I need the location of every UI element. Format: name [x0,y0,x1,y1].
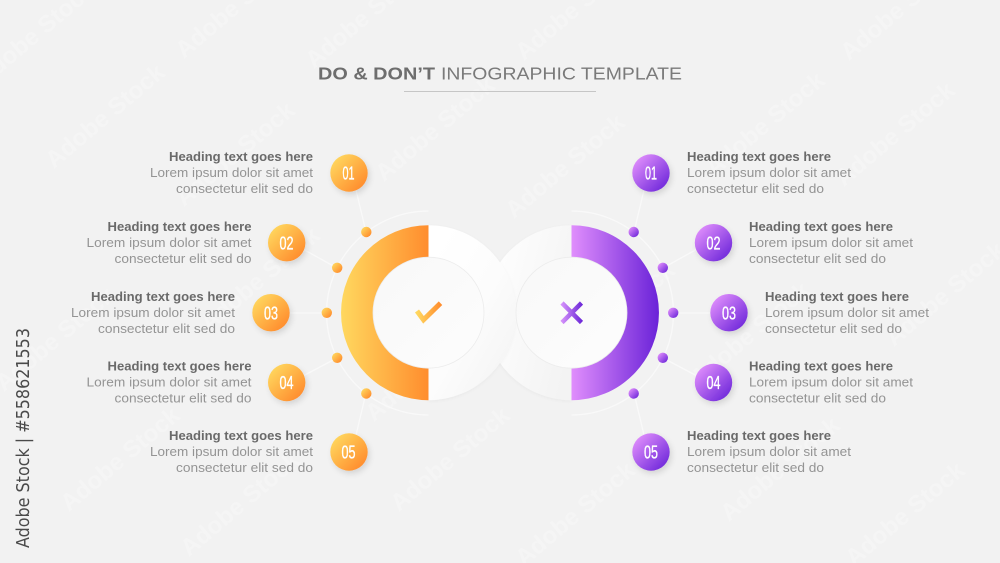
watermark: Adobe Stock [830,76,961,192]
watermark: Adobe Stock [170,96,301,212]
ring: do white half [428,225,516,400]
watermark: Adobe Stock [700,66,831,182]
don't item 03 [710,290,930,336]
don't item 02: consectetur elit sed do [749,252,886,266]
do item 03 [71,290,290,336]
watermark: Adobe Stock [175,446,306,562]
title: DO & DON’T [318,64,435,84]
don't item 02: Heading text goes here [749,220,893,234]
do item 03: Lorem ipsum dolor sit amet [71,306,236,320]
inner circle: do [373,257,484,368]
watermark: Adobe Stock [55,401,186,517]
do item 01 [150,150,368,196]
title: INFOGRAPHIC TEMPLATE [441,64,682,84]
do item 02 [86,220,305,266]
do item 03: Heading text goes here [91,290,235,304]
don't item 04: Lorem ipsum dolor sit amet [749,376,914,390]
don't item 05: consectetur elit sed do [687,461,824,475]
don't item 02: Lorem ipsum dolor sit amet [749,236,914,250]
icon: cross mark [562,303,582,322]
don't item 03: consectetur elit sed do [765,322,902,336]
do item 05: Lorem ipsum dolor sit amet [150,445,314,459]
do item 01: Lorem ipsum dolor sit amet [150,166,314,180]
do item 05: 05 [342,442,356,462]
do item 01: 01 [342,164,354,184]
watermark: Adobe Stock [40,58,171,174]
don't item 05: 05 [644,442,658,462]
ring: do orange half [341,225,428,400]
do item 02: consectetur elit sed do [114,252,252,266]
do item 04: 04 [280,373,294,393]
do item 04: Heading text goes here [108,360,252,374]
diagram: do and don't rings [341,225,659,400]
don't item 05: Lorem ipsum dolor sit amet [687,445,852,459]
watermark: Adobe Stock [195,221,326,337]
do item 05: Heading text goes here [169,429,313,443]
dots: don't side [628,227,678,399]
do item 03: 03 [264,304,278,324]
ring: don't white half [484,225,572,400]
do item 05: consectetur elit sed do [176,461,313,475]
watermark: Adobe Stock [370,71,501,187]
don't item 04: Heading text goes here [749,360,893,374]
don't item 01 [632,150,852,196]
don't item 05: Heading text goes here [687,429,831,443]
ring: don't purple half [572,225,659,400]
don't item 04: 04 [706,373,720,393]
watermark: Adobe Stock [360,311,491,427]
don't item 03: Heading text goes here [765,290,909,304]
do item 01: Heading text goes here [169,150,313,164]
watermark: Adobe Stock [500,108,631,224]
do item 04: consectetur elit sed do [114,392,252,406]
don't item 03: 03 [722,304,736,324]
do item 02: Heading text goes here [108,220,252,234]
don't item 01: consectetur elit sed do [687,182,824,196]
don't item 03: Lorem ipsum dolor sit amet [765,306,930,320]
watermark: Adobe Stock [715,411,846,527]
side credit: Adobe Stock | #558621553 [13,328,34,548]
do item 04: Lorem ipsum dolor sit amet [86,376,252,390]
watermark: Adobe Stock [385,401,516,517]
do item 03: consectetur elit sed do [98,322,235,336]
title [318,64,682,92]
don't item 02: 02 [706,234,720,254]
don't item 01: Heading text goes here [687,150,831,164]
don't item 01: 01 [645,164,657,184]
watermark: Adobe Stock [550,256,681,372]
do item 02: 02 [280,234,294,254]
do item 02: Lorem ipsum dolor sit amet [86,236,252,250]
do item 04 [86,360,305,406]
inner circle: don't [516,257,627,368]
do item 05 [150,429,368,475]
watermark: Adobe Stock [685,276,816,392]
connector lines [290,190,710,435]
don't item 01: Lorem ipsum dolor sit amet [687,166,852,180]
don't item 05 [632,429,852,475]
icon: check mark [417,303,440,320]
don't item 04: consectetur elit sed do [749,392,886,406]
dots: do side [322,227,371,399]
don't item 04 [695,360,914,406]
do item 01: consectetur elit sed do [176,182,313,196]
don't item 02 [695,220,914,266]
